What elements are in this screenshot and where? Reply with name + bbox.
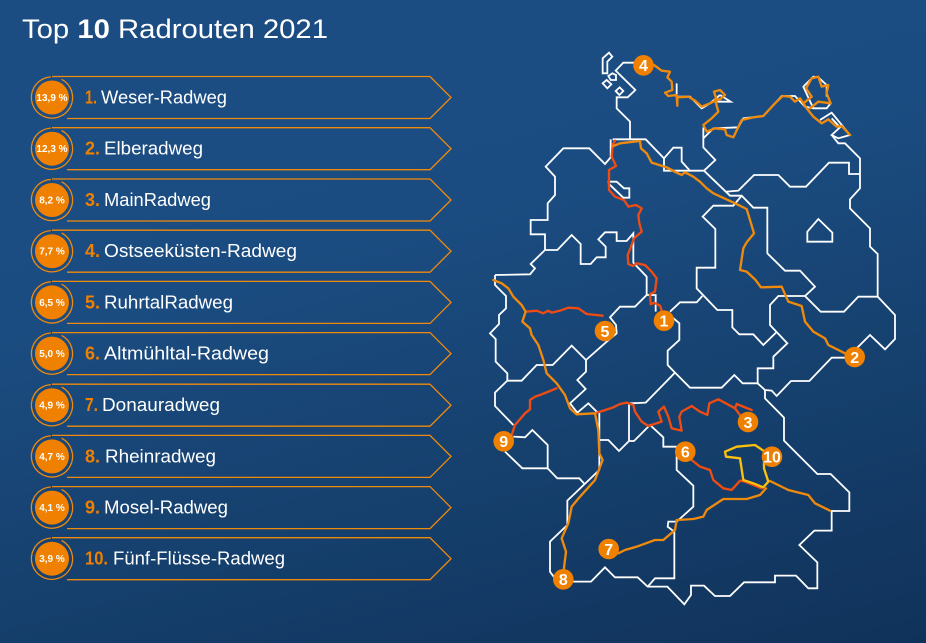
row 4: Ostseeküsten-Radweg: 7,7 % [39, 247, 65, 258]
row 1: Weser-Radweg: 1. [85, 88, 97, 108]
row 5: RuhrtalRadweg [24, 275, 451, 330]
marker 3 [738, 412, 758, 432]
marker 4: 4 [639, 58, 648, 75]
row 2: Elberadweg [24, 121, 451, 177]
row 7: Donauradweg: 7. [85, 395, 98, 415]
row 1: Weser-Radweg: Weser-Radweg [101, 88, 227, 108]
map of Germany [490, 53, 895, 604]
marker 2: 2 [850, 350, 859, 367]
row 1: Weser-Radweg: 13,9 % [36, 93, 68, 104]
row 8: Rheinradweg: 8. [85, 446, 100, 466]
marker 4 [633, 55, 654, 76]
row 8: Rheinradweg: 4,7 % [39, 452, 65, 463]
row 9: Mosel-Radweg: Mosel-Radweg [104, 498, 228, 518]
row 2: Elberadweg: Elberadweg [104, 139, 203, 159]
route 9: Mosel-Radweg [512, 388, 557, 435]
marker 1: 1 [660, 314, 669, 330]
row 4: Ostseeküsten-Radweg: Ostseeküsten-Radweg [104, 241, 297, 261]
marker 10: 10 [763, 450, 781, 466]
route 8: Rheinradweg [493, 280, 603, 573]
route 6: Altmühltal-Radweg [692, 460, 762, 490]
row 5: RuhrtalRadweg: 5. [85, 292, 100, 312]
row 4: Ostseeküsten-Radweg [24, 223, 451, 279]
marker 9: 9 [499, 434, 508, 451]
row 9: Mosel-Radweg: 9. [85, 498, 100, 518]
row 8: Rheinradweg [24, 429, 451, 484]
row 6: Altmühltal-Radweg: 6. [85, 344, 100, 364]
row 3: MainRadweg [24, 172, 451, 228]
marker 6: 6 [681, 444, 690, 462]
federal state borders [490, 53, 895, 604]
route markers [493, 55, 865, 590]
row 9: Mosel-Radweg [24, 480, 451, 535]
marker 8: 8 [559, 572, 568, 589]
row 2: Elberadweg: 12,3 % [36, 144, 68, 155]
row 8: Rheinradweg: Rheinradweg [105, 446, 216, 466]
marker 5 [595, 321, 615, 341]
row 10: Fünf-Flüsse-Radweg [24, 531, 451, 587]
row 4: Ostseeküsten-Radweg: 4. [85, 241, 100, 261]
row 10: Fünf-Flüsse-Radweg: 10. [85, 549, 108, 569]
route 5: RuhrtalRadweg [526, 308, 603, 316]
row 6: Altmühltal-Radweg: Altmühltal-Radweg [104, 344, 269, 364]
row 6: Altmühltal-Radweg: 5,0 % [39, 349, 65, 360]
route 10: Fünf-Flüsse-Radweg [725, 445, 768, 487]
route 1: Weser-Radweg [609, 141, 662, 311]
marker 5: 5 [601, 324, 610, 341]
marker 1 [654, 310, 674, 331]
ranking list [24, 70, 451, 587]
row 7: Donauradweg [24, 377, 451, 433]
row 10: Fünf-Flüsse-Radweg: Fünf-Flüsse-Radweg [113, 549, 285, 569]
route 2: Elberadweg [613, 141, 845, 353]
marker 8 [553, 569, 574, 590]
marker 9 [493, 431, 514, 452]
row 7: Donauradweg: 4,9 % [39, 401, 65, 412]
route 3: MainRadweg [595, 399, 752, 431]
route 4: Ostseeküsten-Radweg [654, 65, 850, 137]
title: Top 10 Radrouten 2021 [22, 14, 328, 44]
row 9: Mosel-Radweg: 4,1 % [39, 503, 65, 514]
row 3: MainRadweg: MainRadweg [104, 190, 211, 210]
row 5: RuhrtalRadweg: 6,5 % [39, 298, 65, 309]
row 6: Altmühltal-Radweg [24, 326, 451, 381]
row 5: RuhrtalRadweg: RuhrtalRadweg [104, 292, 233, 312]
marker 7: 7 [604, 542, 613, 559]
marker 7 [598, 539, 619, 559]
row 2: Elberadweg: 2. [85, 139, 100, 159]
row 3: MainRadweg: 8,2 % [39, 196, 65, 206]
row 10: Fünf-Flüsse-Radweg: 3,9 % [39, 554, 65, 565]
marker 3: 3 [744, 415, 753, 432]
row 7: Donauradweg: Donauradweg [102, 395, 220, 415]
marker 6 [675, 441, 696, 462]
row 3: MainRadweg: 3. [85, 190, 100, 210]
marker 2 [844, 347, 865, 367]
row 1: Weser-Radweg [24, 70, 451, 125]
route 7: Donauradweg [618, 481, 830, 553]
